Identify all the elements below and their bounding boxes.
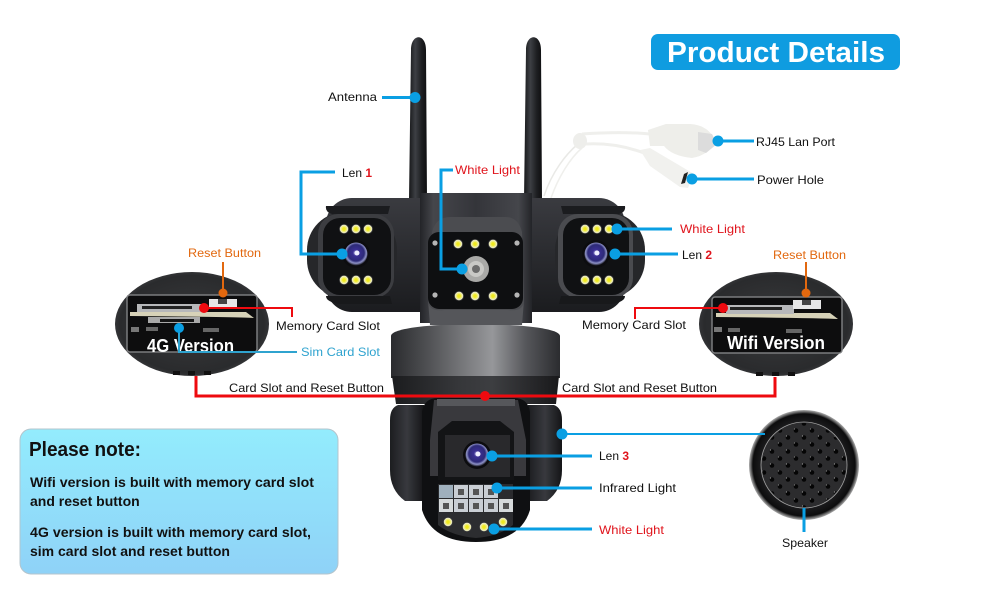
upper housing — [326, 193, 625, 325]
callout labels — [188, 90, 846, 550]
text block: wifi version: Wifi version is built with memory card slot — [30, 474, 314, 490]
icon: antennas — [409, 37, 542, 200]
lower drum — [391, 324, 560, 404]
callout labels: Power Hole — [757, 173, 824, 187]
callout lines: orange — [218, 262, 810, 298]
inset: 4G version slot: 4G Version — [147, 336, 234, 356]
callout labels: Reset Button — [773, 248, 846, 262]
callout labels: Card Slot and Reset Button — [229, 381, 384, 395]
inset: Wifi version slot: Wifi Version — [727, 333, 825, 353]
callout labels: White Light — [599, 523, 665, 537]
callout labels: White Light — [680, 222, 746, 236]
callout line: sim card slot — [174, 323, 297, 352]
inset: Wifi version slot — [699, 272, 853, 376]
title: Product Details: Product Details — [667, 37, 885, 69]
callout labels: RJ45 Lan Port — [756, 135, 836, 149]
text block: 4G version: 4G version is built with memory card slot, — [30, 524, 311, 540]
right lens module — [555, 206, 645, 304]
icon: dome camera — [307, 193, 645, 542]
text block: 4G version: sim card slot and reset button — [30, 543, 230, 559]
callout labels: Memory Card Slot — [276, 319, 381, 333]
callout labels: Len 1 — [342, 166, 372, 180]
inset: 4G version slot — [115, 272, 269, 376]
callout labels: Antenna — [328, 90, 377, 104]
callout labels: Speaker — [782, 536, 828, 550]
callout labels: Sim Card Slot — [301, 345, 381, 359]
callout labels: Card Slot and Reset Button — [562, 381, 717, 395]
icon: cable with RJ45 port and power jack — [544, 124, 717, 198]
left lens module — [307, 206, 397, 304]
callout labels: Infrared Light — [599, 481, 677, 495]
callout labels: Len 3 — [599, 449, 629, 463]
centre light module — [428, 217, 524, 310]
icon: speaker — [749, 410, 859, 520]
heading: please note: Please note: — [29, 439, 141, 461]
side arms — [390, 405, 562, 501]
callout lines: red — [196, 303, 775, 401]
callout labels: Memory Card Slot — [582, 318, 687, 332]
callout lines: blue — [301, 92, 804, 534]
callout labels: Reset Button — [188, 246, 261, 260]
callout labels: Len 2 — [682, 248, 712, 262]
panel: please note — [20, 429, 338, 574]
text block: wifi version: and reset button — [30, 493, 140, 509]
lower camera pod — [422, 398, 530, 542]
callout labels: White Light — [455, 163, 521, 177]
